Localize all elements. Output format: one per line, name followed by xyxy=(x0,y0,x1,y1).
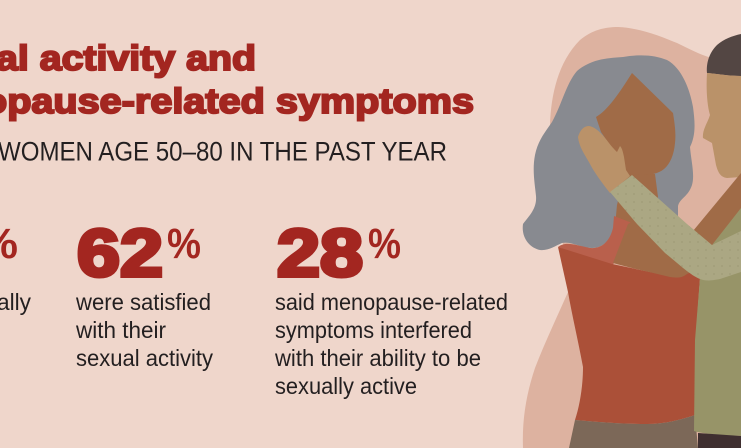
stat: 62 percent satisfied: sexual activity xyxy=(76,345,213,371)
man neck xyxy=(693,173,741,246)
woman skirt xyxy=(569,415,698,448)
man face xyxy=(703,73,741,178)
stat: 62 percent satisfied: were satisfied xyxy=(75,289,211,315)
woman neck xyxy=(615,172,658,232)
man shirt xyxy=(694,265,741,436)
stat: 28 percent interfered: sexually active xyxy=(275,373,417,399)
stat: cropped first column xyxy=(0,220,31,315)
woman arm xyxy=(613,215,700,278)
subtitle: WOMEN AGE 50–80 IN THE PAST YEAR xyxy=(0,136,447,166)
illustration: embracing couple xyxy=(523,27,741,448)
woman dress xyxy=(558,247,700,424)
woman hand xyxy=(578,126,630,193)
man hair xyxy=(707,34,741,76)
stat: 28 percent interfered: said menopause-related xyxy=(275,289,508,315)
man trousers xyxy=(698,433,741,448)
title: al activity and xyxy=(0,39,256,78)
stat: 28 percent interfered: symptoms interfered xyxy=(275,317,472,343)
woman neckline xyxy=(558,210,632,267)
stat: 62 percent satisfied: % xyxy=(167,220,201,268)
stat: 28 percent interfered: 28 xyxy=(277,216,363,291)
background blob xyxy=(523,27,741,448)
stat: 62 percent satisfied: 62 xyxy=(77,216,163,291)
woman face xyxy=(596,73,675,175)
stat: 28 percent interfered xyxy=(274,216,508,399)
stat: 28 percent interfered: with their ability to be xyxy=(274,345,481,371)
title xyxy=(0,39,474,121)
stat: 62 percent satisfied: with their xyxy=(75,317,166,343)
man collar xyxy=(712,208,741,245)
stat: 28 percent interfered: % xyxy=(368,220,401,268)
man sleeve xyxy=(610,175,741,280)
stat: 62 percent satisfied xyxy=(75,216,213,371)
woman hair xyxy=(523,55,695,250)
